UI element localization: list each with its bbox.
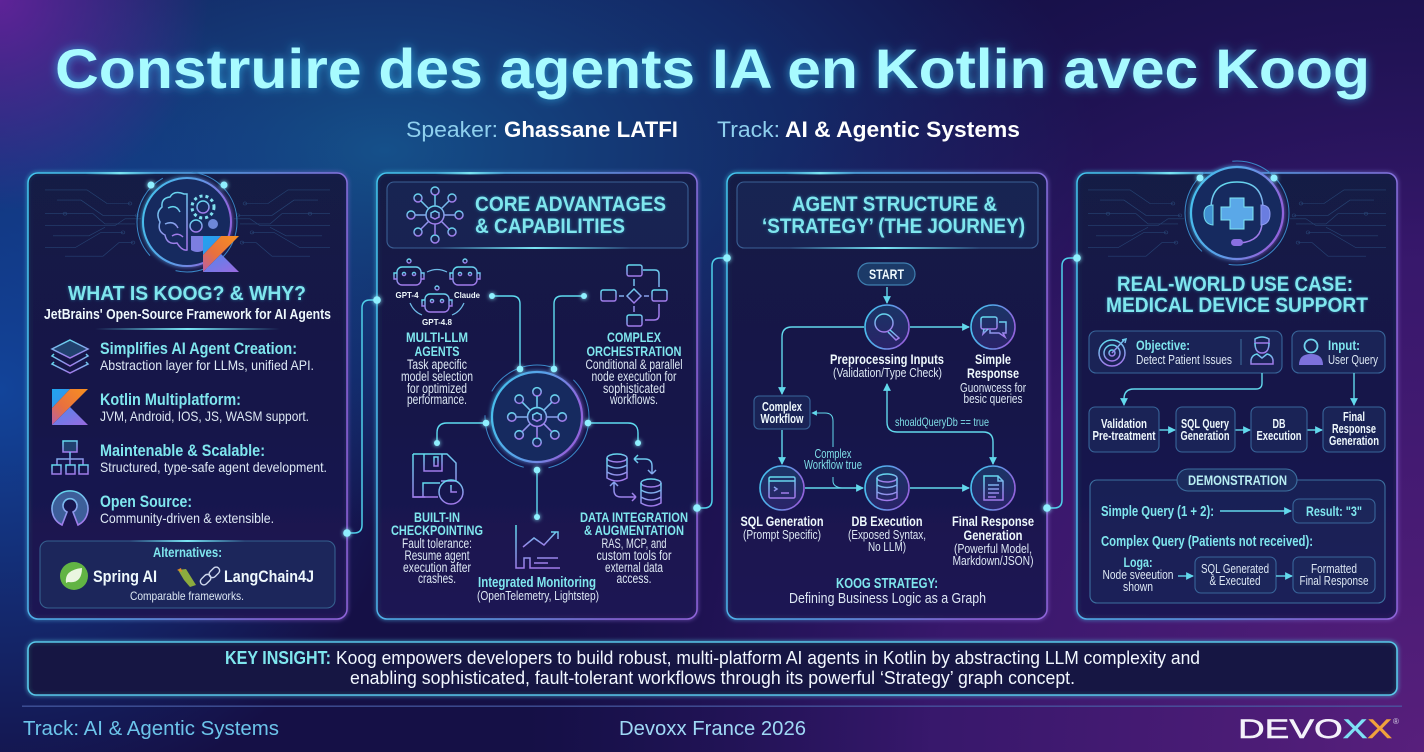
icon: open source bbox=[52, 491, 88, 525]
capability: checkpointing: Resume agent bbox=[404, 548, 470, 563]
node: final response: Markdown/JSON) bbox=[952, 553, 1034, 568]
item: simplifies: Simplifies AI Agent Creation: bbox=[100, 339, 297, 358]
node: SQL generation: SQL Generation bbox=[740, 513, 824, 529]
demonstration box: Simple Query (1 + 2): bbox=[1101, 504, 1214, 520]
flow: validation: Validation bbox=[1101, 416, 1147, 431]
capability: multi-LLM: performance. bbox=[407, 392, 467, 407]
connectors between panels bbox=[347, 258, 1077, 533]
central hub icon bbox=[485, 365, 589, 469]
icon: robots: Claude bbox=[454, 290, 480, 300]
result box bbox=[1293, 499, 1375, 523]
icon: floppy and clock bbox=[413, 454, 463, 504]
node: DB execution: No LLM) bbox=[868, 539, 906, 554]
demonstration box: Complex Query (Patients not received): bbox=[1101, 534, 1313, 550]
node: SQL generation: (Prompt Specific) bbox=[743, 527, 821, 542]
node: complex workflow bbox=[754, 396, 810, 429]
panel connector dots bbox=[343, 254, 1081, 537]
hub connection dots bbox=[434, 293, 641, 520]
header box: ‘STRATEGY’ (THE JOURNEY) bbox=[762, 215, 1025, 238]
subtitle: speaker and track: AI & Agentic Systems bbox=[785, 117, 1020, 142]
SQL generated box bbox=[1195, 557, 1276, 593]
node: DB execution: (Exposed Syntax, bbox=[848, 527, 926, 542]
capability: complex orchestration: sophisticated bbox=[603, 381, 665, 396]
alternatives box: Comparable frameworks. bbox=[130, 589, 244, 603]
strategy caption bbox=[789, 576, 986, 607]
heading: REAL-WORLD USE CASE: bbox=[1117, 273, 1353, 296]
START pill bbox=[858, 263, 915, 285]
logs: shown bbox=[1123, 580, 1153, 594]
capability: data integration: RAS, MCP, and bbox=[602, 536, 666, 551]
START pill: START bbox=[869, 266, 904, 282]
header box: AGENT STRUCTURE & bbox=[792, 193, 997, 216]
icon: nurse bbox=[1251, 337, 1273, 364]
demonstration box bbox=[1090, 469, 1385, 603]
capability: data integration: & AUGMENTATION bbox=[584, 522, 684, 538]
header box bbox=[737, 182, 1038, 249]
capability: monitoring: Integrated Monitoring bbox=[478, 575, 596, 591]
demonstration pill bbox=[1177, 469, 1297, 491]
flow: DB execution: DB bbox=[1272, 416, 1286, 431]
node: simple response: Guonwcess for bbox=[960, 380, 1027, 395]
item: simplifies bbox=[52, 339, 314, 373]
formatted final response box: Formatted bbox=[1311, 561, 1357, 576]
capability: monitoring bbox=[477, 525, 599, 603]
flow arrows bbox=[782, 287, 993, 488]
key insight banner: enabling sophisticated, fault-tolerant workflows through its powerful ‘Strategy’ graph concept. bbox=[350, 668, 1075, 688]
node: preprocessing: (Validation/Type Check) bbox=[833, 365, 942, 380]
input box: User Query bbox=[1328, 352, 1378, 367]
title: Construire des agents IA en Kotlin avec Koog bbox=[55, 37, 1370, 100]
formatted final response box: Final Response bbox=[1300, 573, 1368, 588]
panel: what is Koog bbox=[28, 172, 347, 619]
logs bbox=[1102, 554, 1174, 594]
flow: DB execution: Execution bbox=[1256, 428, 1302, 443]
icon: robots: GPT-4 bbox=[396, 290, 419, 300]
icon: hierarchy bbox=[52, 441, 88, 474]
capability: checkpointing bbox=[391, 454, 483, 586]
condition label: complex workflow true: Complex bbox=[814, 447, 852, 461]
spokes from central hub bbox=[437, 296, 638, 517]
capability: data integration: access. bbox=[616, 571, 652, 586]
footer: track: Track: AI & Agentic Systems bbox=[23, 718, 279, 740]
node: simple response: Response bbox=[967, 365, 1019, 381]
logs: Node sveeution bbox=[1102, 568, 1174, 582]
icon: databases bbox=[607, 454, 661, 506]
flow: final response: Response bbox=[1332, 421, 1376, 436]
objective box: Objective: bbox=[1136, 337, 1190, 353]
item: simplifies: Abstraction layer for LLMs, unified API. bbox=[100, 357, 314, 373]
capability: complex orchestration: node execution for bbox=[592, 369, 677, 384]
node: simple response: besic queries bbox=[964, 391, 1023, 406]
node: final response: Generation bbox=[964, 527, 1022, 543]
footer: Devoxx logo: ® bbox=[1393, 717, 1399, 726]
node: DB execution: DB Execution bbox=[852, 513, 922, 529]
flow: validation bbox=[1089, 407, 1159, 452]
header box: CORE ADVANTAGES bbox=[475, 193, 666, 216]
icon: network hub bbox=[407, 187, 463, 243]
SQL generated box: SQL Generated bbox=[1201, 561, 1269, 576]
item: kotlin multiplatform: JVM, Android, IOS, JS, WASM support. bbox=[100, 408, 309, 424]
capability: multi-LLM: model selection bbox=[401, 369, 473, 384]
header box bbox=[387, 182, 688, 249]
panel: real-world use case: MEDICAL DEVICE SUPPORT bbox=[1106, 294, 1368, 317]
capability: complex orchestration: ORCHESTRATION bbox=[586, 343, 682, 359]
icon: flowchart bbox=[601, 265, 667, 326]
capability: checkpointing: execution after bbox=[403, 560, 471, 575]
node: simple response: Simple bbox=[975, 351, 1011, 367]
subheading: JetBrains' Open-Source Framework for AI Agents bbox=[44, 307, 331, 323]
flow: final response: Generation bbox=[1329, 433, 1379, 448]
icon: robots bbox=[394, 259, 480, 327]
item: kotlin multiplatform bbox=[52, 389, 309, 425]
icon: parrot and chain bbox=[177, 566, 221, 587]
node: complex workflow: Complex bbox=[762, 399, 803, 414]
item: maintenable: Maintenable & Scalable: bbox=[100, 441, 265, 460]
flow: final response: Final bbox=[1343, 409, 1365, 424]
capability: data integration bbox=[580, 454, 688, 586]
panel: agent structure bbox=[727, 172, 1047, 619]
flow: final response bbox=[1323, 407, 1385, 452]
flow: DB execution bbox=[1251, 407, 1307, 452]
subtitle: speaker and track: Speaker: bbox=[406, 117, 498, 142]
icon: layers bbox=[52, 340, 88, 373]
strategy caption: KOOG STRATEGY: bbox=[836, 576, 938, 592]
input box bbox=[1292, 331, 1385, 373]
node: preprocessing bbox=[830, 305, 944, 380]
item: maintenable: Structured, type-safe agent development. bbox=[100, 459, 327, 475]
panel: real-world use case bbox=[1077, 161, 1397, 619]
subtitle: speaker and track: Ghassane LATFI bbox=[504, 117, 678, 142]
node: final response bbox=[952, 466, 1034, 568]
footer: Devoxx logo: DEVO XX bbox=[1238, 714, 1392, 744]
heading: WHAT IS KOOG? & WHY? bbox=[68, 282, 306, 305]
capability: multi-LLM: Task apecific bbox=[407, 357, 467, 372]
item: open source: Community-driven & extensible. bbox=[100, 510, 274, 526]
strategy caption: Defining Business Logic as a Graph bbox=[789, 591, 986, 607]
demonstration pill: DEMONSTRATION bbox=[1188, 472, 1287, 488]
panel: core advantages bbox=[377, 172, 697, 619]
condition label: complex workflow true: Workflow true bbox=[804, 458, 862, 472]
item: maintenable bbox=[52, 441, 327, 475]
condition label: complex workflow true bbox=[804, 447, 862, 472]
subtitle: speaker and track: Track: bbox=[717, 117, 780, 142]
SQL generated box: & Executed bbox=[1210, 573, 1260, 588]
header box: & CAPABILITIES bbox=[475, 215, 625, 238]
key insight banner: Koog empowers developers to build robust, multi-platform AI agents in Kotlin by abstracting LLM complexity and bbox=[336, 648, 1200, 668]
capability: data integration: custom tools for bbox=[596, 548, 672, 563]
capability: complex orchestration: workflows. bbox=[609, 392, 658, 407]
icon: user bbox=[1299, 340, 1323, 365]
key insight banner bbox=[28, 642, 1397, 695]
capability: complex orchestration: Conditional & parallel bbox=[586, 357, 683, 372]
capability: checkpointing: crashes. bbox=[418, 571, 456, 586]
icon: target bbox=[1099, 339, 1126, 366]
flow: SQL query: Generation bbox=[1180, 428, 1230, 443]
icon: brain and gears with Kotlin logo bbox=[137, 172, 239, 272]
icon: line chart bbox=[516, 525, 560, 568]
input box: Input: bbox=[1328, 337, 1360, 353]
alternatives box: LangChain4J bbox=[224, 567, 314, 586]
capability: checkpointing: Fault tolerance: bbox=[402, 536, 472, 551]
capability: multi-LLM bbox=[394, 259, 480, 407]
node: preprocessing: Preprocessing Inputs bbox=[830, 351, 944, 367]
logs: Loga: bbox=[1124, 554, 1152, 570]
flow: SQL query bbox=[1176, 407, 1235, 452]
capability: checkpointing: CHECKPOINTING bbox=[391, 522, 483, 538]
subtitle: speaker and track bbox=[406, 117, 1020, 142]
capability: monitoring: (OpenTelemetry, Lightstep) bbox=[477, 588, 599, 603]
objective box bbox=[1089, 331, 1282, 373]
icon: spring leaf bbox=[60, 562, 88, 590]
key insight banner: KEY INSIGHT: bbox=[225, 648, 331, 668]
capability: complex orchestration bbox=[586, 265, 683, 407]
capability: complex orchestration: COMPLEX bbox=[607, 329, 662, 345]
node: DB execution bbox=[848, 466, 926, 554]
footer: event: Devoxx France 2026 bbox=[619, 718, 806, 740]
node: simple response bbox=[960, 305, 1027, 406]
capability: data integration: DATA INTEGRATION bbox=[580, 509, 688, 525]
alternatives box bbox=[40, 540, 335, 608]
node: complex workflow: Workflow bbox=[760, 411, 804, 426]
icon: Kotlin logo bbox=[52, 389, 88, 425]
flow: SQL query: SQL Query bbox=[1181, 416, 1230, 431]
formatted final response box bbox=[1293, 557, 1375, 593]
icon: robots: GPT-4.8 bbox=[422, 317, 452, 327]
node: SQL generation bbox=[740, 466, 824, 542]
result box: Result: "3" bbox=[1306, 503, 1362, 519]
alternatives box: Spring AI bbox=[93, 567, 157, 586]
item: kotlin multiplatform: Kotlin Multiplatform: bbox=[100, 390, 241, 409]
capability: checkpointing: BUILT-IN bbox=[414, 509, 460, 525]
capability: data integration: external data bbox=[605, 560, 663, 575]
item: open source: Open Source: bbox=[100, 492, 192, 511]
flow: validation: Pre-treatment bbox=[1092, 428, 1156, 443]
capability: multi-LLM: MULTI-LLM bbox=[406, 329, 468, 345]
capability: multi-LLM: for optimized bbox=[407, 381, 467, 396]
node: final response: (Powerful Model, bbox=[954, 541, 1032, 556]
objective box: Detect Patient Issues bbox=[1136, 352, 1232, 367]
use-case flow arrows bbox=[1124, 373, 1354, 430]
alternatives box: Alternatives: bbox=[153, 545, 222, 560]
node: final response: Final Response bbox=[952, 513, 1034, 529]
condition label: shouldQueryDb: shoaldQueryDb == true bbox=[895, 415, 989, 429]
capability: multi-LLM: AGENTS bbox=[414, 343, 460, 359]
icon: medical headset bbox=[1185, 161, 1289, 265]
item: open source bbox=[52, 491, 274, 526]
